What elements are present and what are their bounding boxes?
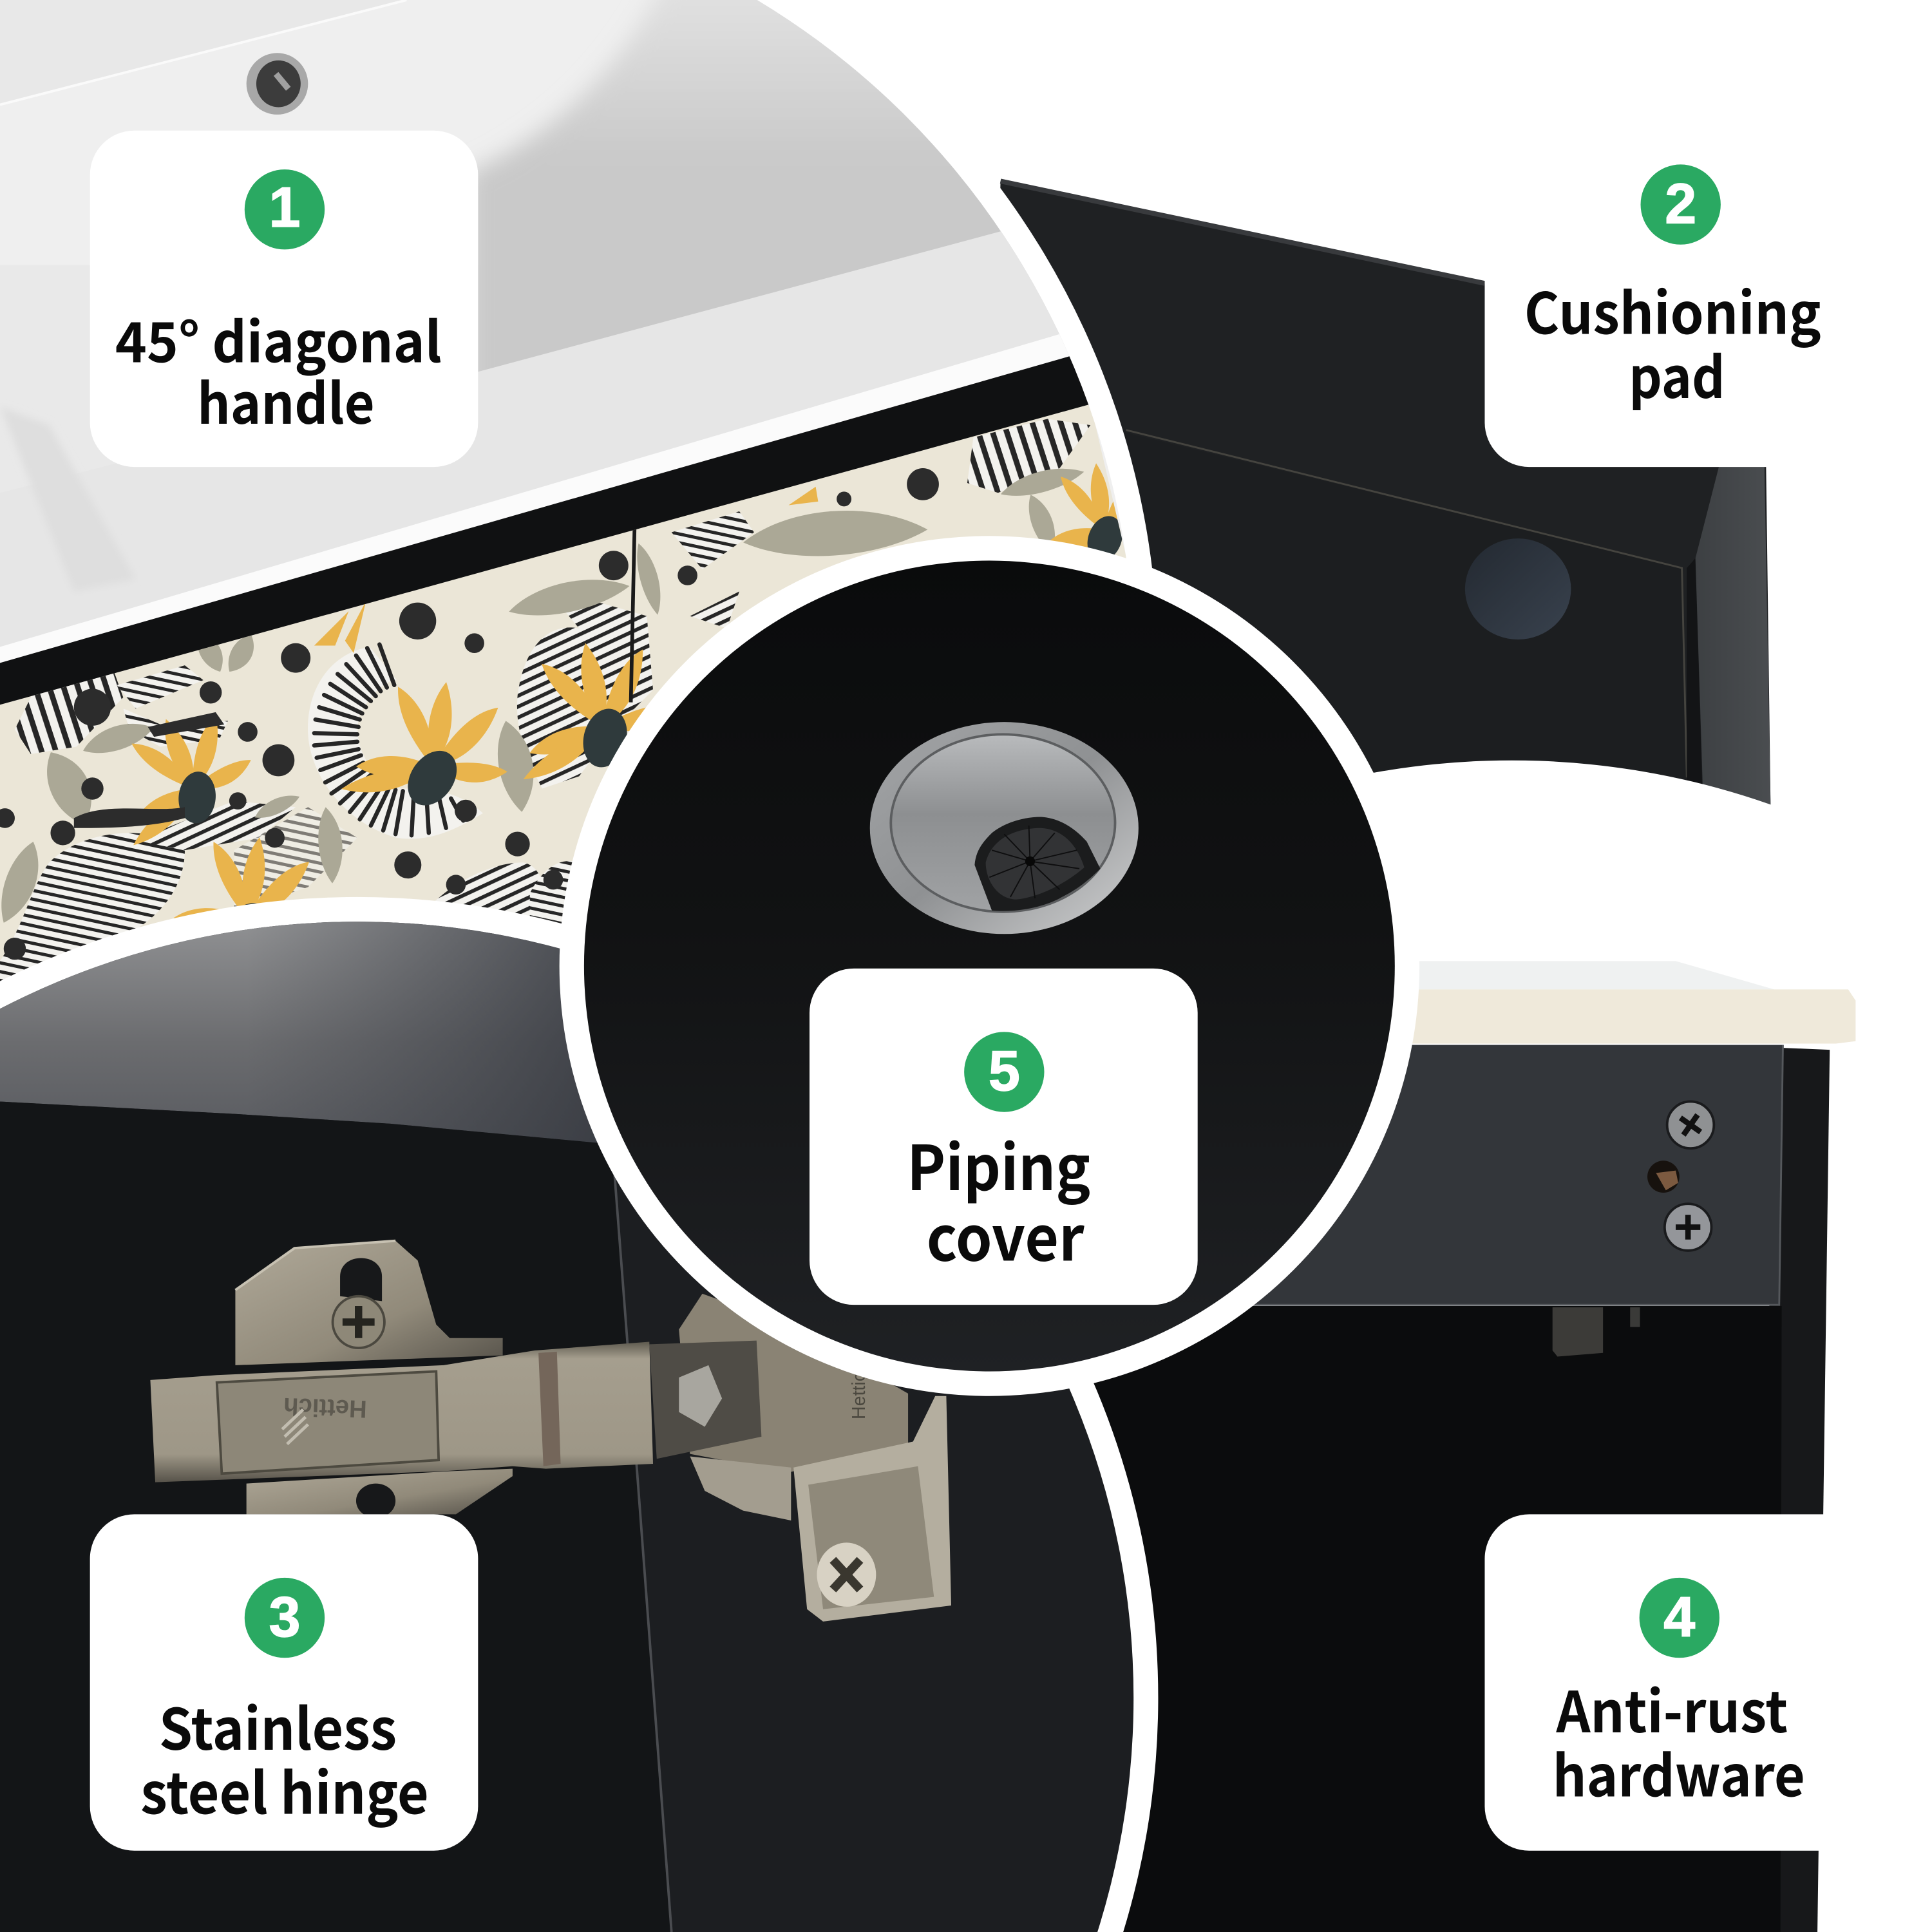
zebra stripes	[0, 419, 1090, 998]
callout 4: anti-rust hardware	[1484, 1514, 1873, 1851]
callout 2: cushioning pad	[1484, 131, 1873, 467]
badge 5	[964, 1032, 1044, 1112]
hinge top plate	[235, 1241, 503, 1365]
label 2	[1524, 269, 1821, 415]
hardware bracket	[1553, 1307, 1640, 1357]
yellow flowers	[104, 463, 1160, 980]
label 5: cover	[927, 1189, 1084, 1278]
callout 1: 45 degree diagonal handle	[90, 131, 478, 467]
label 5: Piping	[907, 1119, 1090, 1208]
hinge arm	[150, 1342, 653, 1482]
label 1: 45° diagonal	[115, 298, 442, 378]
label 4: hardware	[1553, 1732, 1805, 1814]
badge 4	[1640, 1578, 1719, 1658]
badge 2	[1641, 164, 1721, 245]
hinge cup plate: Hettich	[849, 1362, 869, 1419]
sink basin	[0, 0, 1109, 665]
label 1: handle	[197, 359, 375, 440]
callout 3: stainless steel hinge	[90, 1514, 478, 1851]
label 1	[115, 298, 442, 440]
patterned doors	[0, 404, 1126, 981]
panel: diagonal handle photo	[0, 0, 1152, 981]
label 2: pad	[1629, 333, 1725, 415]
label 3: Stainless	[159, 1685, 397, 1766]
label 4: Anti-rust	[1556, 1667, 1788, 1749]
panel: anti-rust hardware photo	[1084, 961, 1855, 1932]
badge 1: 1	[269, 175, 300, 239]
door gap	[631, 527, 634, 703]
label 4	[1553, 1667, 1805, 1814]
icon: overflow ring	[247, 53, 308, 115]
callout 5: piping cover	[810, 969, 1198, 1305]
grey leaves	[0, 460, 1086, 929]
badge 4: 4	[1663, 1585, 1695, 1649]
black edge strip	[0, 355, 1094, 705]
label 5	[907, 1119, 1090, 1278]
label 3	[140, 1685, 429, 1830]
black dots	[0, 468, 939, 960]
icon: grommet	[870, 722, 1139, 934]
badge 3	[245, 1578, 325, 1658]
label 2: Cushioning	[1524, 269, 1821, 350]
hinge lower plate	[247, 1469, 513, 1518]
label 3: steel hinge	[140, 1748, 429, 1830]
icon: cushioning pad	[1465, 538, 1571, 639]
badge 5: 5	[989, 1039, 1020, 1103]
hinge	[150, 1241, 951, 1622]
badge 3: 3	[269, 1585, 300, 1649]
hinge cube	[649, 1341, 761, 1459]
hinge cup plate	[679, 1294, 951, 1622]
badge 2: 2	[1665, 171, 1696, 235]
badge 1	[245, 169, 325, 249]
panel: stainless steel hinge photo	[0, 897, 1158, 1932]
icon: screws and hole	[1647, 1101, 1714, 1251]
hinge brand: Hettich	[283, 1392, 367, 1423]
panel: cushioning pad photo	[986, 181, 1770, 807]
white arc mask under cushioning photo	[733, 761, 1932, 1539]
panel: piping cover photo	[560, 536, 1419, 1396]
